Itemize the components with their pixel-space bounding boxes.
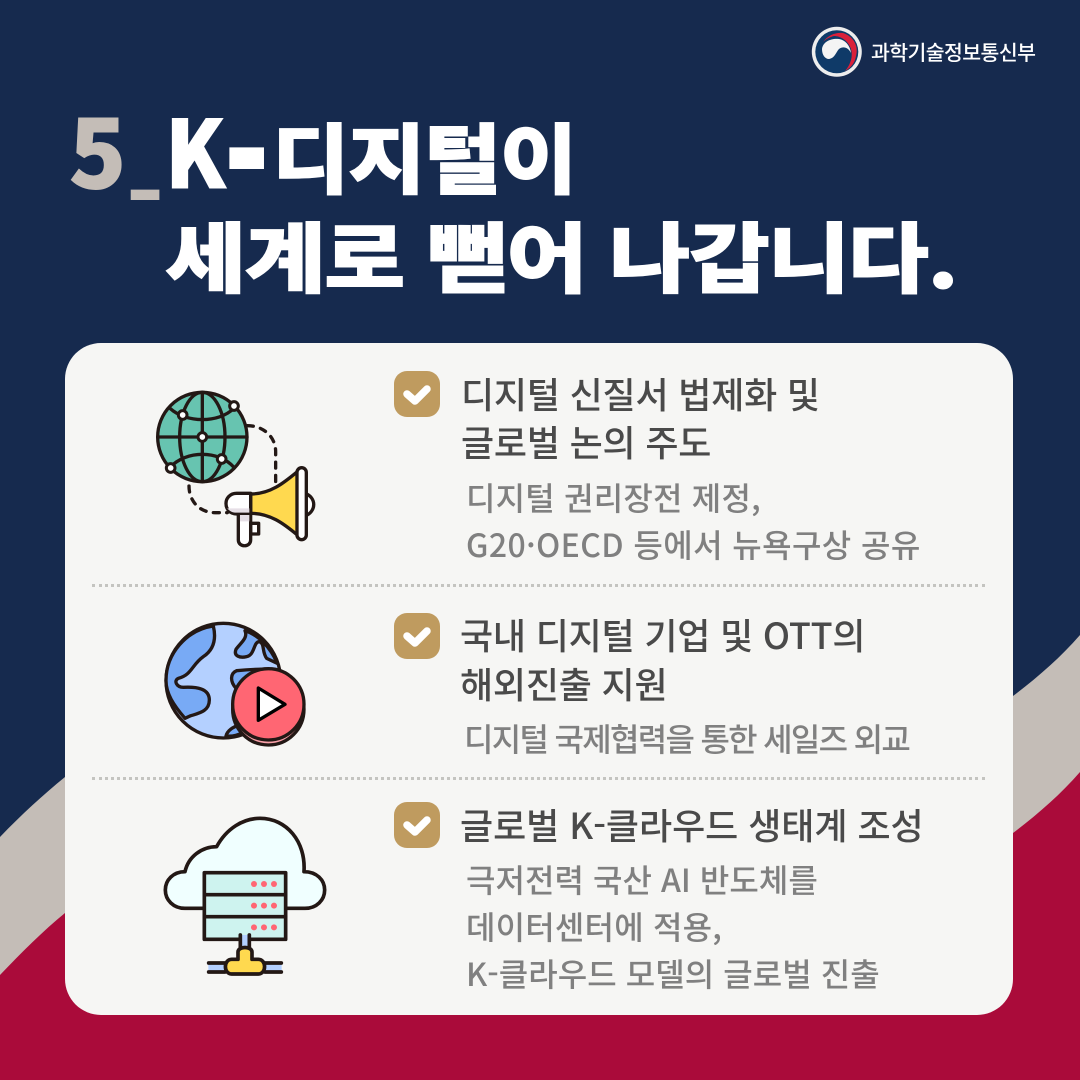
title letter K: K [165, 80, 226, 215]
title line 1: 디지털이 [272, 99, 576, 210]
divider 1 [92, 584, 985, 587]
title underscore: _ [130, 62, 160, 214]
title line 2: 세계로 뻗어 나갑니다. [165, 198, 957, 309]
check icon 3 [394, 802, 440, 848]
divider 2 [92, 777, 985, 780]
heading 1 line 1: 디지털 신질서 법제화 및 [461, 367, 820, 419]
detail 1 line 1: 디지털 권리장전 제정, [466, 474, 761, 520]
detail 1 line 2: G20·OECD 등에서 뉴욕구상 공유 [466, 521, 921, 567]
title number 5: 5 [69, 80, 126, 216]
heading 2 line 2: 해외진출 지원 [460, 657, 667, 709]
title hyphen: - [224, 35, 269, 267]
ministry logo [812, 26, 1036, 77]
heading 2 line 1: 국내 디지털 기업 및 OTT의 [460, 608, 865, 660]
detail 3 line 3: K-클라우드 모델의 글로벌 진출 [466, 950, 880, 996]
panel: policy list card [65, 343, 1013, 1015]
check icon 1 [394, 371, 440, 417]
heading 3: 글로벌 K-클라우드 생태계 조성 [460, 798, 924, 850]
detail 3 line 1: 극저전력 국산 AI 반도체를 [466, 856, 818, 902]
heading 1 line 2: 글로벌 논의 주도 [461, 415, 711, 467]
detail 2: 디지털 국제협력을 통한 세일즈 외교 [464, 715, 909, 761]
logo emblem [812, 26, 862, 77]
ministry name: 과학기술정보통신부 [871, 36, 1035, 66]
detail 3 line 2: 데이터센터에 적용, [466, 903, 722, 949]
check icon 2 [394, 613, 440, 659]
